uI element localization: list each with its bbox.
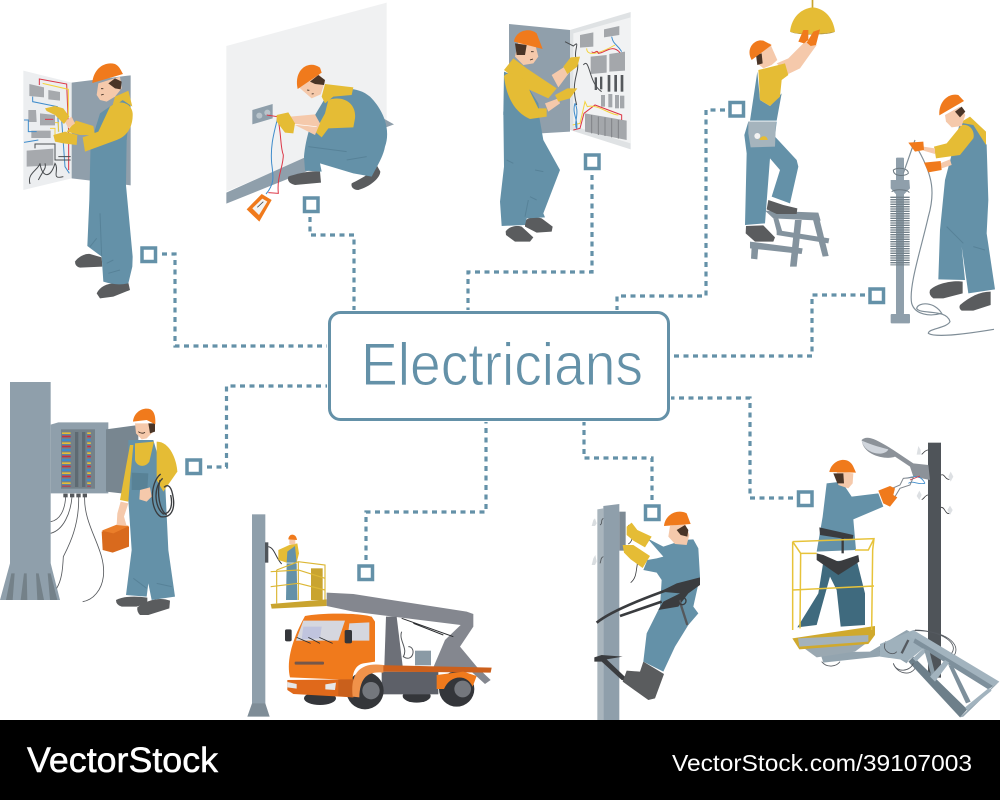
connectors: dotted lines from the centre box to each scene xyxy=(162,110,865,560)
scene: electrician at open panel, top left xyxy=(23,63,133,298)
scene: electrician wiring a high-voltage insulator xyxy=(891,95,995,335)
image url: VectorStock.com/39107003 xyxy=(672,750,972,776)
scene: electrician on stool fitting a ceiling lamp xyxy=(744,0,835,267)
title: Electricians xyxy=(361,331,643,398)
lift truss structure at foot of the pole xyxy=(880,630,999,717)
logo text: VectorStock xyxy=(27,741,219,780)
scene: aerial lift truck xyxy=(285,593,492,709)
scene: electrician at large wiring cabinet xyxy=(500,12,631,242)
marker squares xyxy=(142,102,884,580)
scene: worker in lift basket repairing street light xyxy=(792,438,956,678)
scene: electrician testing a wall socket xyxy=(226,3,394,222)
watermark footer bar xyxy=(0,720,1000,800)
scene: lineman climbing a pole with belt and climbers xyxy=(592,504,700,720)
title box xyxy=(330,312,668,420)
scene: electrician with toolbox at street cabinet xyxy=(0,382,177,615)
stool xyxy=(750,211,829,267)
scene: worker on bucket at pole xyxy=(247,514,327,717)
